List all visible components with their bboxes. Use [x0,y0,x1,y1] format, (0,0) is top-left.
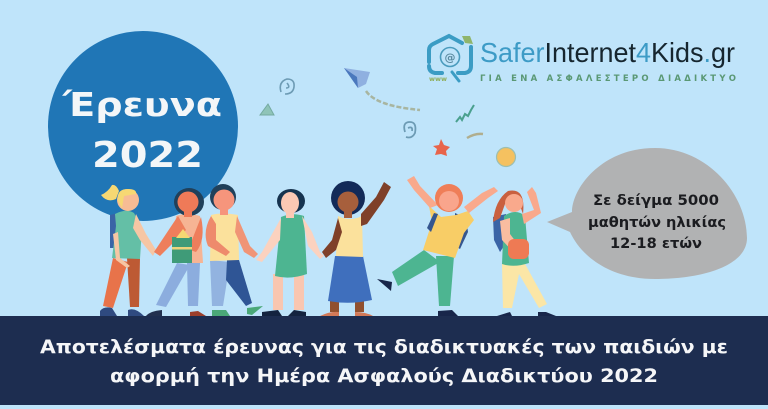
child 6: child kicking with backpack [377,176,498,316]
child 4: girl in green dress [256,189,324,316]
icon: house with at sign: www [429,75,447,83]
icon: triangle [260,104,274,115]
children group illustration [100,176,556,316]
speech bubble [547,148,747,279]
blue circle badge: Έρευνα 2022: 2022 [92,135,203,176]
icon: spiral left [280,79,294,94]
logo: SaferInternet4Kids.gr [429,36,736,84]
child 1: blond girl [100,185,156,316]
speech bubble: 12-18 ετών [610,236,702,252]
icon: sun [496,148,516,166]
icon: paper plane [344,68,420,110]
bottom banner [0,316,768,405]
icon: house with at sign [429,36,473,83]
logo wordmark: SaferInternet4Kids.gr [480,37,735,68]
child 2: girl with books [146,188,206,316]
child 7: red-haired girl with bag [493,187,556,316]
icon: spiral centre [404,122,415,138]
child 3: boy in pale yellow vest [206,184,263,316]
decorative doodles: paper plane, spirals, star, sun [260,68,516,166]
icon: small dash doodle [467,134,483,138]
icon: red star [433,139,450,156]
blue circle badge: Έρευνα 2022: Έρευνα [62,85,222,124]
blue circle badge: Έρευνα 2022 [48,31,238,221]
speech bubble: μαθητών ηλικίας [588,215,726,231]
child 5: girl in blue skirt [320,181,391,316]
banner headline: Αποτελέσματα έρευνας για τις διαδικτυακές των παιδιών με [40,336,728,358]
bottom banner: αφορμή την Ημέρα Ασφαλούς Διαδικτύου 2022 [110,365,658,387]
logo tagline: ΓΙΑ ΕΝΑ ΑΣΦΑΛΕΣΤΕΡΟ ΔΙΑΔΙΚΤΥΟ [480,74,736,84]
icon: house with at sign: @ [444,51,456,64]
bubble text: Σε δείγμα 5000 [593,193,719,209]
icon: squiggle [456,105,474,122]
